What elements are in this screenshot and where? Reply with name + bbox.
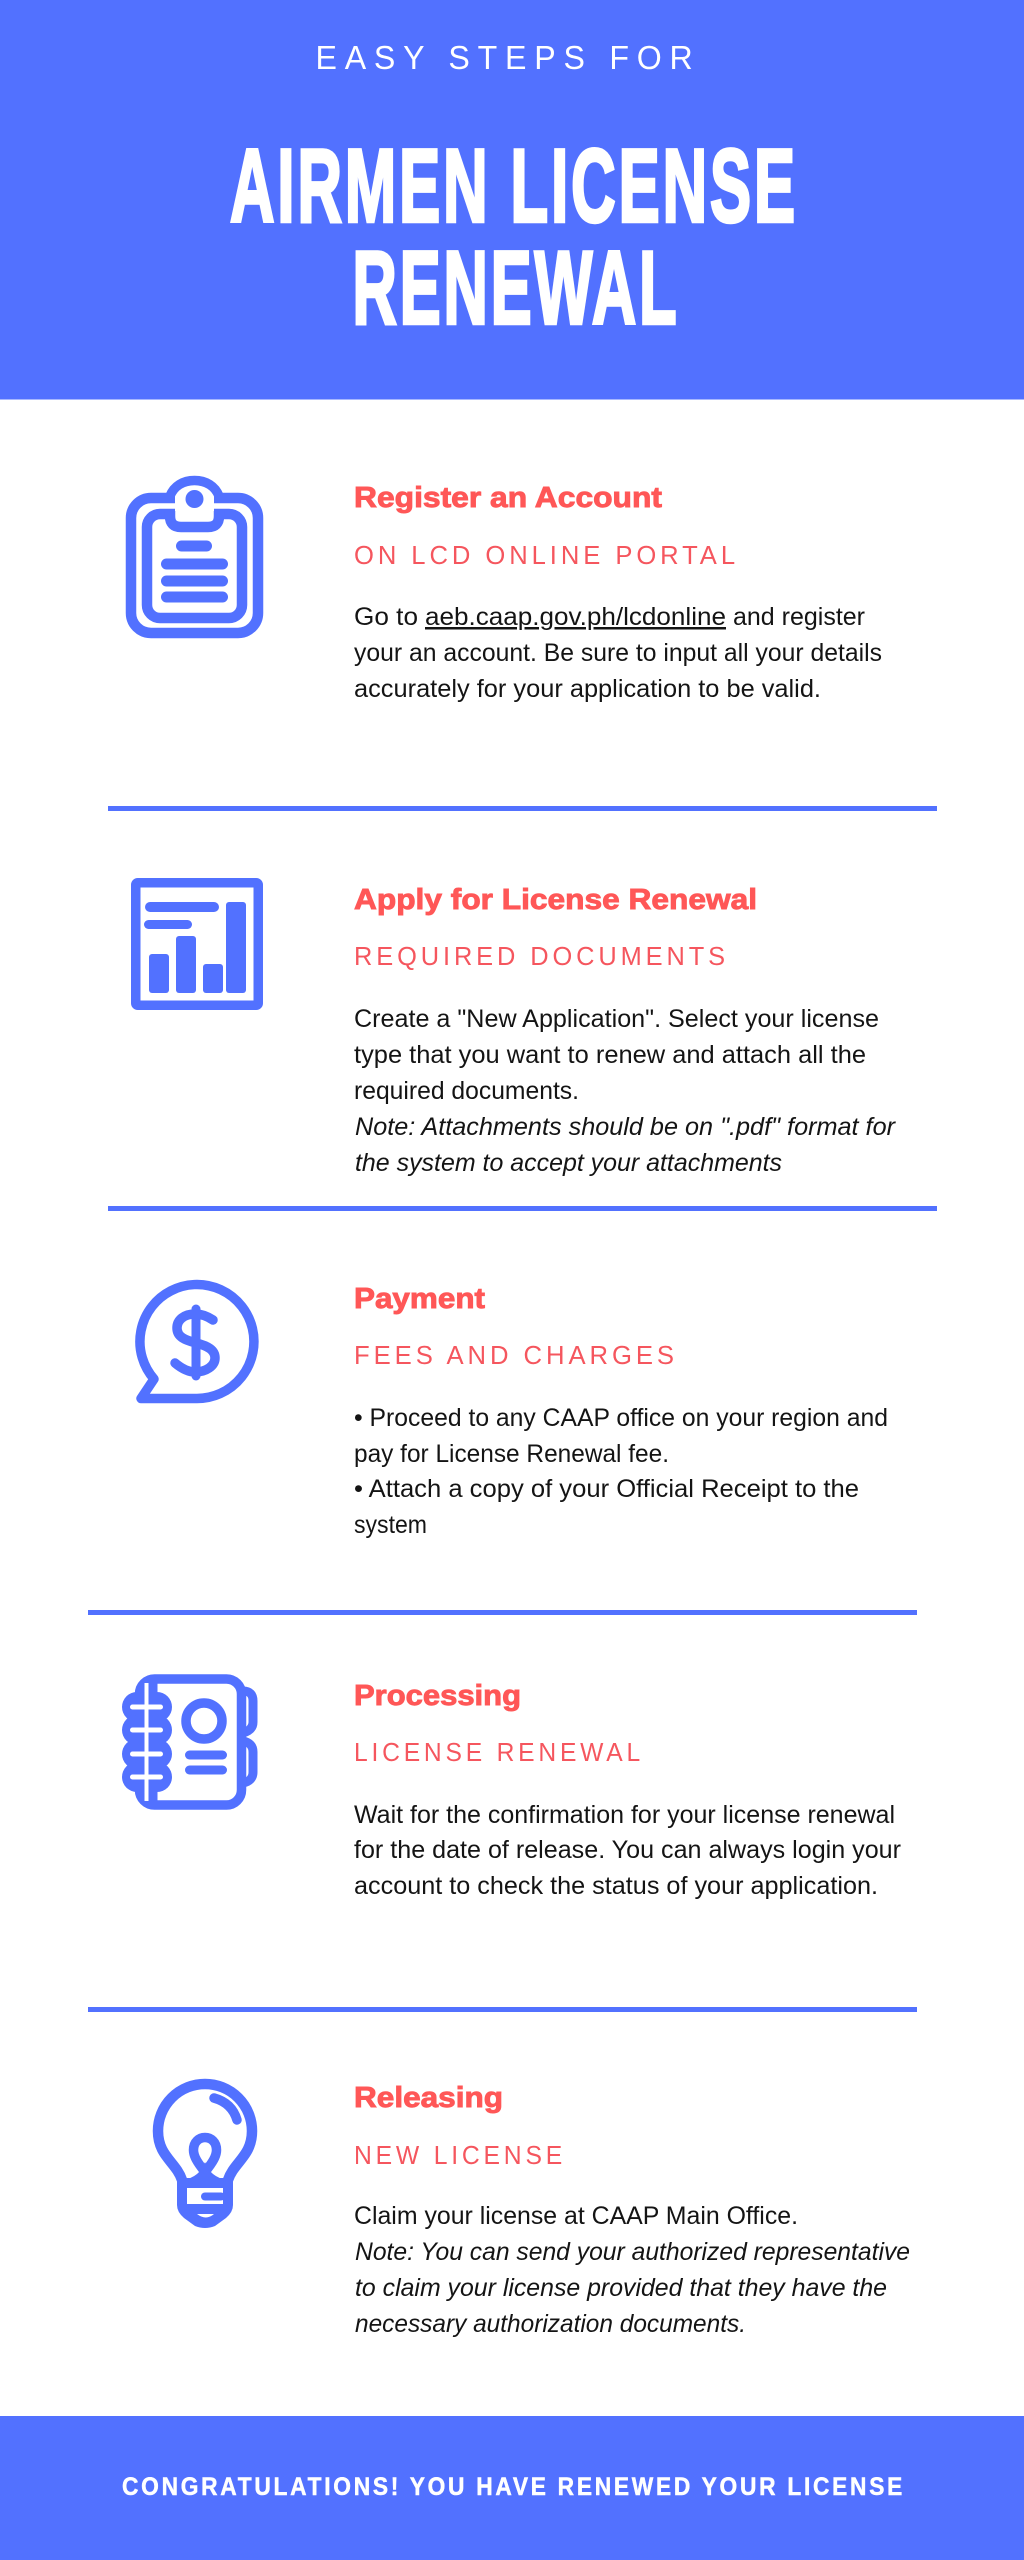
step 3 subheading: FEES AND CHARGES [354,1340,678,1370]
step 3 body text: • Proceed to any CAAP office on your region and [354,1404,888,1432]
step 2 body text [354,1005,897,1177]
step 3 body text: pay for License Renewal fee. [354,1440,669,1468]
step 3 body text [354,1404,888,1539]
step 5 heading: Releasing [354,2082,503,2114]
step 5 body text: to claim your license provided that they have the [355,2274,887,2302]
step 3 heading: Payment [354,1283,485,1315]
icon: light bulb [158,2084,252,2228]
step 5 body text [354,2202,910,2338]
step 2 body text: Note: Attachments should be on ".pdf" format for [355,1113,897,1141]
step 4 body text [354,1801,901,1900]
icon: clipboard [131,480,258,633]
icon: report with bar chart [136,883,258,1005]
step 1 body text: accurately for your application to be valid. [354,675,821,703]
panel: step 5 releasing [158,2082,910,2338]
step 2 heading: Apply for License Renewal [354,884,757,916]
step 1 subheading: ON LCD ONLINE PORTAL [354,540,739,570]
header banner [0,0,1024,400]
step 4 heading: Processing [354,1680,521,1712]
step 1 body text [354,603,882,703]
step 2 body text: type that you want to renew and attach all the [354,1041,866,1069]
footer banner [0,2416,1024,2560]
footer message: CONGRATULATIONS! YOU HAVE RENEWED YOUR LICENSE [122,2473,905,2501]
step 2 body text: the system to accept your attachments [355,1149,782,1177]
panel: step 3 payment [140,1283,888,1539]
panel: step 2 apply [136,883,897,1177]
step 5 body text: Note: You can send your authorized representative [355,2238,910,2266]
main title: RENEWAL [352,230,680,346]
step 2 body text: Create a "New Application". Select your license [354,1005,879,1033]
eyebrow heading: EASY STEPS FOR [316,39,700,76]
panel: step 4 processing [122,1679,901,1900]
step 1 body text: your an account. Be sure to input all your details [354,639,882,667]
step 1 body text: Go to [354,603,418,631]
step 1 body text: aeb.caap.gov.ph/lcdonline [425,603,726,631]
step 1 body text: and register [733,603,865,631]
icon: speech bubble with dollar sign [140,1285,254,1399]
step 4 subheading: LICENSE RENEWAL [354,1737,644,1767]
step 2 subheading: REQUIRED DOCUMENTS [354,941,729,971]
step 3 body text: system [354,1511,427,1539]
panel: step 1 register [131,480,882,703]
icon: spiral notebook [122,1679,253,1805]
step 4 body text: Wait for the confirmation for your license renewal [354,1801,895,1829]
step 1 heading: Register an Account [354,482,662,514]
step 4 body text: account to check the status of your application. [354,1872,878,1900]
step 4 body text: for the date of release. You can always login your [354,1836,901,1864]
step 5 subheading: NEW LICENSE [354,2140,566,2170]
main title [230,128,798,346]
step 2 body text: required documents. [354,1077,579,1105]
step 3 body text: • Attach a copy of your Official Receipt to the [354,1475,859,1503]
step 5 body text: necessary authorization documents. [355,2310,746,2338]
step 5 body text: Claim your license at CAAP Main Office. [354,2202,798,2230]
